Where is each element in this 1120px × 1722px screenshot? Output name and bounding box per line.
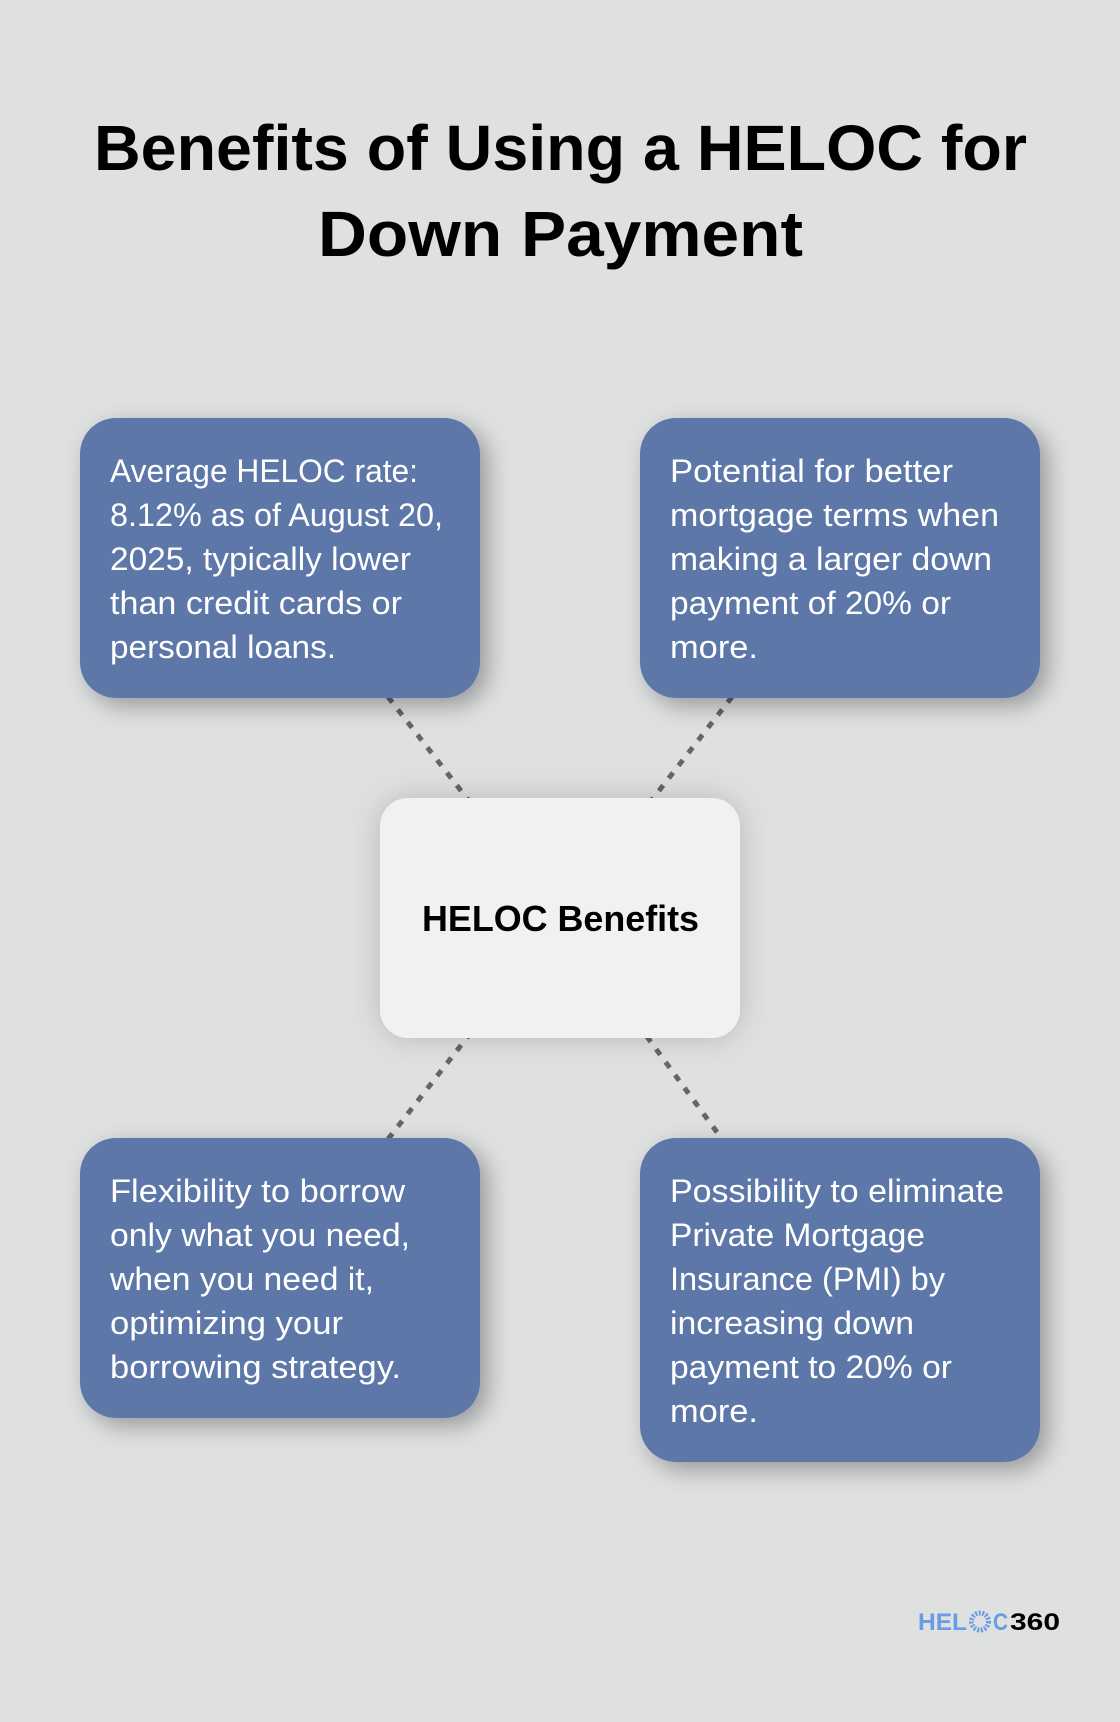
panel: better mortgage terms: Potential for better xyxy=(670,453,953,489)
dashed connector lines xyxy=(280,558,840,1300)
title: Down Payment xyxy=(318,198,803,270)
panel: better mortgage terms: mortgage terms when xyxy=(670,497,999,533)
panel: center HELOC Benefits: HELOC Benefits xyxy=(422,898,699,939)
panel: HELOC rate: 8.12% as of August 20, xyxy=(110,497,443,533)
panel: eliminate PMI: increasing down xyxy=(670,1305,914,1341)
panel: HELOC rate: Average HELOC rate: xyxy=(110,453,418,489)
panel: better mortgage terms: making a larger down xyxy=(670,541,992,577)
logo: HELOC360 xyxy=(918,1609,1060,1636)
panel: better mortgage terms: payment of 20% or xyxy=(670,585,951,621)
panel: eliminate PMI: more. xyxy=(670,1393,758,1429)
title: Benefits of Using a HELOC for xyxy=(94,112,1027,184)
logo: HELOC360: HEL xyxy=(918,1609,967,1636)
panel: flexibility xyxy=(80,1138,480,1418)
panel: flexibility: Flexibility to borrow xyxy=(110,1173,406,1209)
panel: eliminate PMI xyxy=(640,1138,1040,1462)
panel: eliminate PMI: Possibility to eliminate xyxy=(670,1173,1004,1209)
panel: eliminate PMI: Private Mortgage xyxy=(670,1217,925,1253)
panel: flexibility: when you need it, xyxy=(109,1261,374,1297)
icon: swirl O xyxy=(972,1613,988,1630)
panel: better mortgage terms xyxy=(640,418,1040,698)
logo: HELOC360: 360 xyxy=(1010,1609,1060,1636)
panel: HELOC rate xyxy=(80,418,480,698)
panel: center HELOC Benefits xyxy=(380,798,740,1038)
panel: better mortgage terms: more. xyxy=(670,629,758,665)
logo: HELOC360: C xyxy=(993,1609,1008,1636)
panel: eliminate PMI: payment to 20% or xyxy=(670,1349,952,1385)
title xyxy=(94,112,1027,270)
panel: eliminate PMI: Insurance (PMI) by xyxy=(670,1261,945,1297)
panel: HELOC rate: 2025, typically lower xyxy=(110,541,411,577)
panel: flexibility: optimizing your xyxy=(110,1305,343,1341)
panel: HELOC rate: than credit cards or xyxy=(110,585,402,621)
panel: flexibility: only what you need, xyxy=(110,1217,410,1253)
panel: HELOC rate: personal loans. xyxy=(110,629,336,665)
panel: flexibility: borrowing strategy. xyxy=(110,1349,401,1385)
